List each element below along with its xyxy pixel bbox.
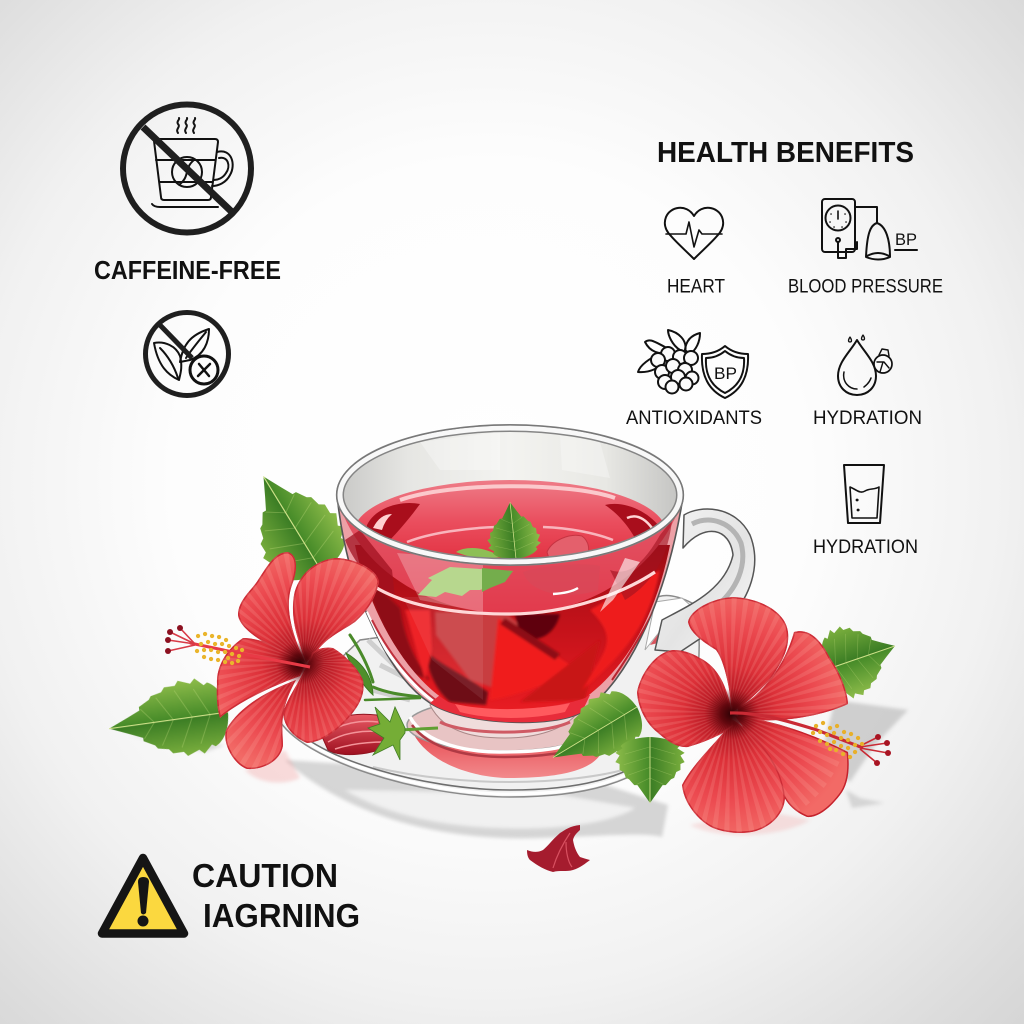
right flower petal: bottom <box>682 720 785 833</box>
cup body with tea <box>337 495 683 722</box>
petal seen through glass <box>523 564 600 595</box>
label: hydration: HYDRATION <box>813 408 922 429</box>
left flower petal: bottom <box>225 680 296 770</box>
icon: blood pressure monitor <box>822 199 917 260</box>
label: blood pressure: BLOOD PRESSURE <box>788 276 943 298</box>
right flower dark core <box>704 688 760 740</box>
fallen calyx <box>527 825 590 872</box>
icon: glass of water <box>844 465 884 523</box>
icon: no tea leaves <box>146 312 228 396</box>
label: caution: CAUTION <box>192 857 338 894</box>
flower bud <box>320 707 438 760</box>
label: heart: HEART <box>667 276 725 298</box>
label: hydration 2: HYDRATION <box>813 537 918 558</box>
band of tea meniscus <box>344 517 676 612</box>
right flower petal: left <box>637 650 732 748</box>
icon: water drop <box>838 335 892 395</box>
left flower petal: left <box>216 638 304 718</box>
icon: shield BP: BP <box>714 364 737 383</box>
left flower petal: upper right <box>292 558 379 662</box>
left flower petal: right <box>283 648 364 743</box>
cup interior <box>336 424 684 566</box>
wall highlights <box>366 611 434 702</box>
icon text: BP: BP <box>895 230 917 249</box>
stems <box>346 635 420 700</box>
icon: heart <box>665 208 723 259</box>
label: antioxidants: ANTIOXIDANTS <box>626 408 762 429</box>
cup rim <box>336 425 684 565</box>
saucer red reflection <box>410 725 600 778</box>
hibiscus flower: right <box>637 597 891 833</box>
icon: warning triangle <box>102 858 184 934</box>
tea liquid <box>355 545 670 709</box>
heading: health benefits: HEALTH BENEFITS <box>657 137 914 169</box>
leaf under glass <box>418 567 513 597</box>
left flower petal: top <box>238 552 304 662</box>
right flower stamen <box>730 713 891 766</box>
leaf: lower left <box>104 674 233 766</box>
mint leaf in tea <box>488 502 541 558</box>
hibiscus flower: left <box>165 552 379 769</box>
petal in tea <box>546 534 589 556</box>
cup handle <box>655 509 755 652</box>
right flower petal: top <box>688 597 788 710</box>
icon: berries <box>638 330 700 394</box>
mint leaf small <box>456 548 500 558</box>
floor shadows <box>130 700 908 838</box>
leaf: back left <box>227 454 359 594</box>
leaf: under flower right <box>615 737 685 803</box>
leaf: under cup right <box>537 680 653 784</box>
tea surface <box>358 480 662 558</box>
cup foot <box>407 699 599 757</box>
left flower dark core <box>276 641 324 685</box>
icon: shield BP <box>702 346 748 398</box>
leaf: back right <box>813 612 907 704</box>
left flower stamen <box>165 625 310 667</box>
icon: caffeine-free prohibition cup <box>123 104 251 232</box>
label: warning: IAGRNING <box>203 897 360 934</box>
label: caffeine-free: CAFFEINE-FREE <box>94 257 281 285</box>
right flower petal: lower right <box>736 716 849 818</box>
saucer <box>278 596 699 797</box>
right flower petal: upper right <box>738 631 848 720</box>
